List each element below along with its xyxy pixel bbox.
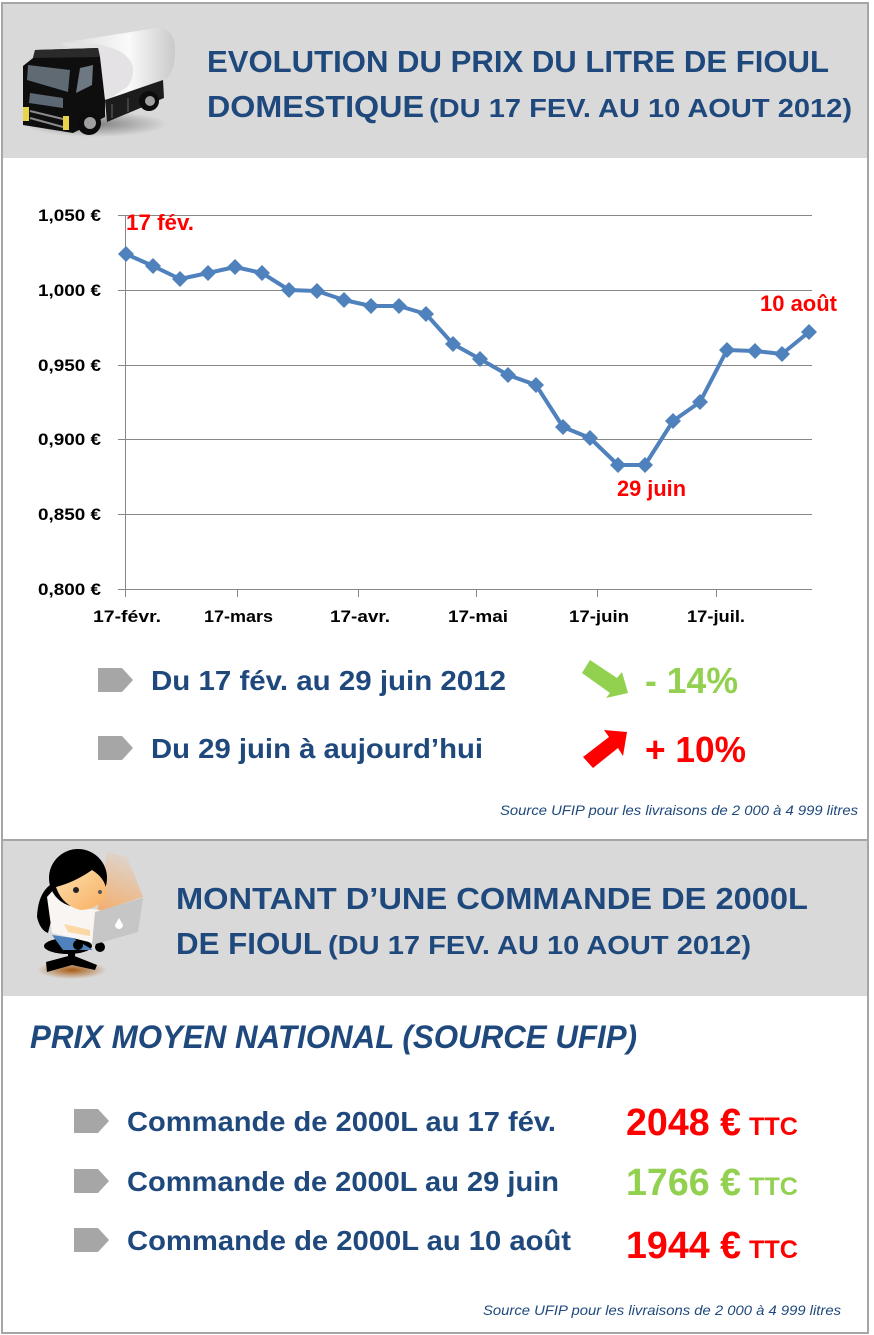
x axis labels: 17-juin bbox=[569, 607, 629, 626]
order row: 10 august: Commande de 2000L au 10 août bbox=[127, 1225, 571, 1256]
order row: 29 june: TTC bbox=[749, 1173, 798, 1201]
source note: Source UFIP pour les livraisons de 2 000 à 4 999 litres bbox=[500, 802, 858, 818]
stat: rise: + 10% bbox=[645, 729, 746, 770]
bullet bbox=[74, 1109, 109, 1133]
order row: 10 august: 1944 € bbox=[626, 1225, 741, 1267]
order row: 29 june bbox=[74, 1162, 798, 1204]
stat: fall: Du 17 fév. au 29 juin 2012 bbox=[151, 665, 506, 696]
order row: 29 june: 1766 € bbox=[626, 1162, 741, 1204]
stat: fall bbox=[98, 660, 738, 701]
order row: 17 feb: 2048 € bbox=[626, 1102, 741, 1144]
panel header: order amount bbox=[3, 841, 867, 996]
order row: 10 august: TTC bbox=[749, 1236, 798, 1264]
x axis labels: 17-juil. bbox=[687, 607, 745, 626]
bullet bbox=[74, 1169, 109, 1193]
heading: DOMESTIQUE bbox=[207, 89, 424, 124]
order row: 17 feb: Commande de 2000L au 17 fév. bbox=[127, 1106, 556, 1137]
heading: (DU 17 FEV. AU 10 AOUT 2012) bbox=[429, 93, 852, 123]
line chart bbox=[38, 206, 838, 626]
y axis labels: 0,950 € bbox=[38, 356, 102, 375]
heading bbox=[207, 44, 852, 124]
icon: person at laptop bbox=[37, 849, 143, 979]
y axis labels: 1,050 € bbox=[38, 206, 102, 225]
panel: price evolution bbox=[2, 3, 868, 840]
x axis labels: 17-mai bbox=[448, 607, 508, 626]
panel header: price evolution bbox=[3, 4, 867, 158]
icon: up arrow bbox=[583, 730, 627, 768]
heading: (DU 17 FEV. AU 10 AOUT 2012) bbox=[328, 930, 751, 960]
heading bbox=[176, 881, 808, 961]
heading: MONTANT D’UNE COMMANDE DE 2000L bbox=[176, 881, 808, 916]
stat: rise bbox=[98, 729, 746, 770]
bullet bbox=[98, 736, 133, 760]
x axis labels: 17-févr. bbox=[93, 607, 161, 626]
y axis labels: 0,850 € bbox=[38, 505, 102, 524]
data callouts bbox=[126, 210, 838, 501]
data callouts: 10 août bbox=[760, 291, 838, 316]
heading: EVOLUTION DU PRIX DU LITRE DE FIOUL bbox=[207, 44, 829, 79]
subheading: PRIX MOYEN NATIONAL (SOURCE UFIP) bbox=[30, 1019, 637, 1055]
bullet bbox=[74, 1228, 109, 1252]
y axis labels bbox=[38, 206, 102, 599]
order row: 10 august bbox=[74, 1225, 798, 1267]
panel: order amount bbox=[2, 840, 868, 1333]
icon: down arrow bbox=[582, 660, 628, 698]
x axis labels: 17-mars bbox=[204, 607, 273, 626]
stat: fall: - 14% bbox=[645, 660, 738, 701]
data markers bbox=[118, 246, 817, 473]
y axis labels: 1,000 € bbox=[38, 281, 102, 300]
x axis labels: 17-avr. bbox=[330, 607, 390, 626]
source note: Source UFIP pour les livraisons de 2 000 à 4 999 litres bbox=[483, 1302, 841, 1318]
order row: 17 feb: TTC bbox=[749, 1113, 798, 1141]
order row: 29 june: Commande de 2000L au 29 juin bbox=[127, 1166, 559, 1197]
data line bbox=[126, 254, 809, 465]
y axis labels: 0,900 € bbox=[38, 430, 102, 449]
order row: 17 feb bbox=[74, 1102, 798, 1144]
bullet bbox=[98, 668, 133, 692]
stat: rise: Du 29 juin à aujourd’hui bbox=[151, 733, 483, 764]
x axis labels bbox=[93, 607, 745, 626]
y axis labels: 0,800 € bbox=[38, 580, 102, 599]
data callouts: 29 juin bbox=[617, 476, 686, 501]
icon: tanker truck bbox=[23, 28, 175, 137]
data callouts: 17 fév. bbox=[126, 210, 194, 235]
heading: DE FIOUL bbox=[176, 926, 322, 961]
